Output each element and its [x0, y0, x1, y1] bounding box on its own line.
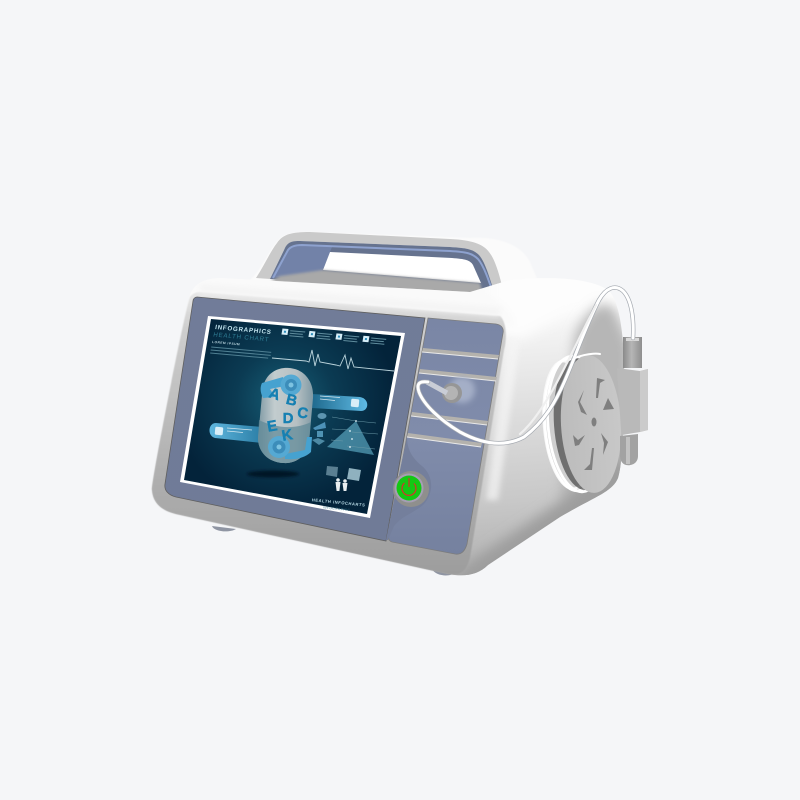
device: [152, 232, 648, 600]
capsule letters: E: [266, 417, 279, 436]
screen: capsule: [258, 368, 313, 463]
screen: footer text: [310, 497, 366, 514]
screen: title: INFOGRAPHICS: [215, 324, 272, 336]
body: side: [152, 278, 624, 575]
panel: screen surround: [165, 297, 425, 541]
screen: [180, 316, 405, 518]
screen: left banner: [209, 423, 262, 443]
body: front rim: [152, 292, 506, 574]
capsule letters: D: [283, 410, 294, 427]
handle: [248, 232, 546, 300]
reel: [537, 354, 625, 494]
screen: title: [210, 324, 275, 359]
capsule disc: bottom: [268, 436, 290, 458]
screen: ecg line: [272, 350, 394, 371]
panel: right controls: [389, 318, 503, 554]
screen: footer text: INFOGRAPHIC: [322, 505, 351, 512]
probe: [617, 337, 648, 465]
capsule letters: A: [267, 385, 282, 404]
screen: display: [184, 319, 401, 514]
power button niche: [386, 437, 431, 540]
reel slots: [573, 378, 614, 470]
screen: white frame: [180, 316, 405, 518]
body: shading: [456, 282, 624, 576]
port: [427, 382, 462, 403]
screen: right banner: [312, 394, 367, 411]
screen: title: HEALTH CHART: [213, 331, 270, 343]
capsule disc: top: [280, 374, 302, 396]
screen: top icons: [281, 328, 386, 345]
rim highlight band: [200, 288, 500, 312]
body: top bevel: [384, 287, 471, 292]
capsule band: top: [261, 377, 285, 398]
screen: title: LOREM IPSUM: [212, 340, 240, 346]
tube: [418, 288, 633, 443]
capsule letters: K: [280, 426, 294, 445]
capsule letters: B: [284, 391, 299, 410]
foot: left: [212, 526, 236, 531]
power button: [393, 471, 429, 507]
capsule band: bottom: [285, 437, 312, 459]
capsule letters: [266, 385, 309, 445]
screen: small icons and pyramid: [312, 413, 378, 455]
screen: pill shadow: [247, 470, 299, 478]
screen: squares and figures: [326, 466, 361, 491]
capsule letters: C: [296, 404, 309, 423]
foot: right: [432, 569, 456, 575]
screen: footer text: HEALTH INFOCHARTS: [311, 497, 366, 508]
